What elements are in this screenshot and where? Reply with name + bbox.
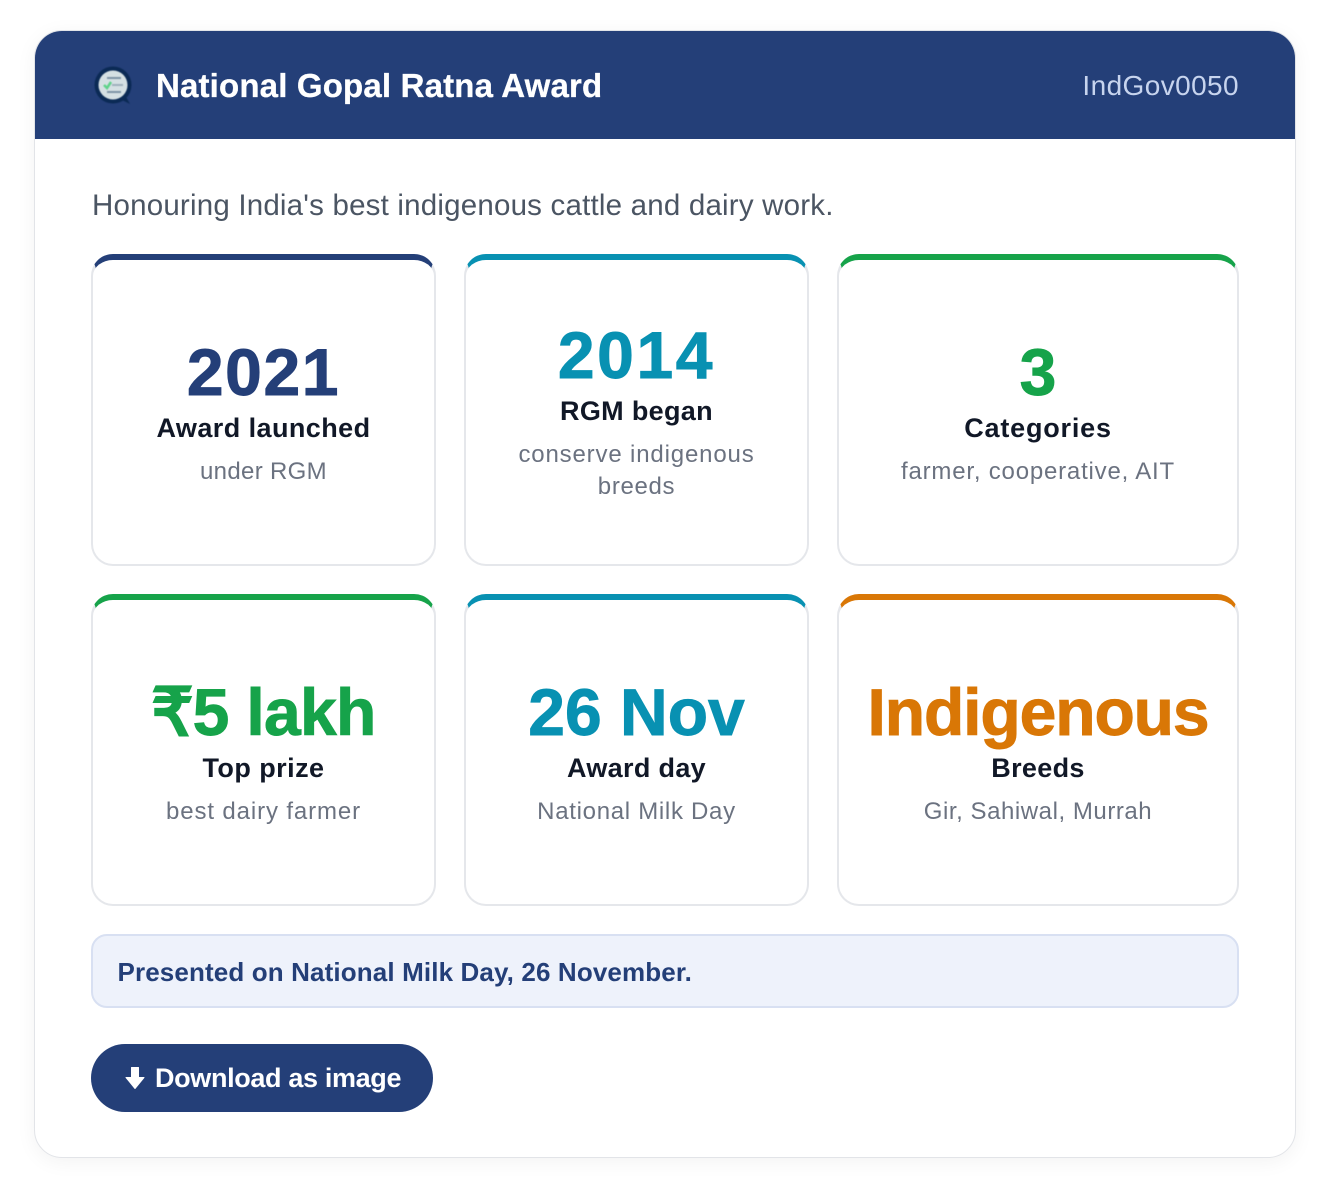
- value: 5 lakh: ₹5 lakh: [151, 675, 376, 749]
- value: 3: 3: [1020, 335, 1056, 409]
- note: [518, 441, 755, 500]
- icon: quiz logo: [94, 66, 132, 104]
- download button: [91, 1044, 433, 1112]
- icon: down arrow: [126, 1067, 144, 1089]
- label: Top prize: [202, 753, 325, 783]
- panel: categories: [837, 254, 1239, 566]
- panel: award day: [464, 594, 809, 906]
- title: National Gopal Ratna Award: [156, 67, 602, 104]
- panel: top prize: [91, 594, 436, 906]
- note: best dairy farmer: [166, 798, 361, 825]
- note: conserve indigenous: [518, 441, 755, 468]
- value: 2021: 2021: [187, 335, 340, 409]
- callout: [91, 934, 1239, 1008]
- panel: breeds: [837, 594, 1239, 906]
- value: 26 Nov: 26 Nov: [528, 675, 745, 749]
- note: farmer, cooperative, AIT: [901, 458, 1175, 485]
- panel: award launched: [91, 254, 436, 566]
- label: Categories: [964, 413, 1112, 443]
- code label: IndGov0050: [1082, 70, 1239, 101]
- header band: [35, 31, 1295, 139]
- button label: Download as image: [155, 1063, 401, 1093]
- panel: RGM began: [464, 254, 809, 566]
- callout text: Presented on National Milk Day, 26 November.: [118, 957, 692, 987]
- value: 2014: 2014: [558, 318, 715, 392]
- note: Gir, Sahiwal, Murrah: [924, 798, 1152, 825]
- label: Award day: [567, 753, 706, 783]
- note: breeds: [598, 473, 675, 500]
- note: National Milk Day: [537, 798, 736, 825]
- note: under RGM: [200, 458, 327, 485]
- subtitle: Honouring India's best indigenous cattle and dairy work.: [92, 189, 834, 222]
- label: Breeds: [991, 753, 1085, 783]
- value: Indigenous: Indigenous: [868, 675, 1208, 749]
- label: RGM began: [560, 396, 713, 426]
- label: Award launched: [156, 413, 371, 443]
